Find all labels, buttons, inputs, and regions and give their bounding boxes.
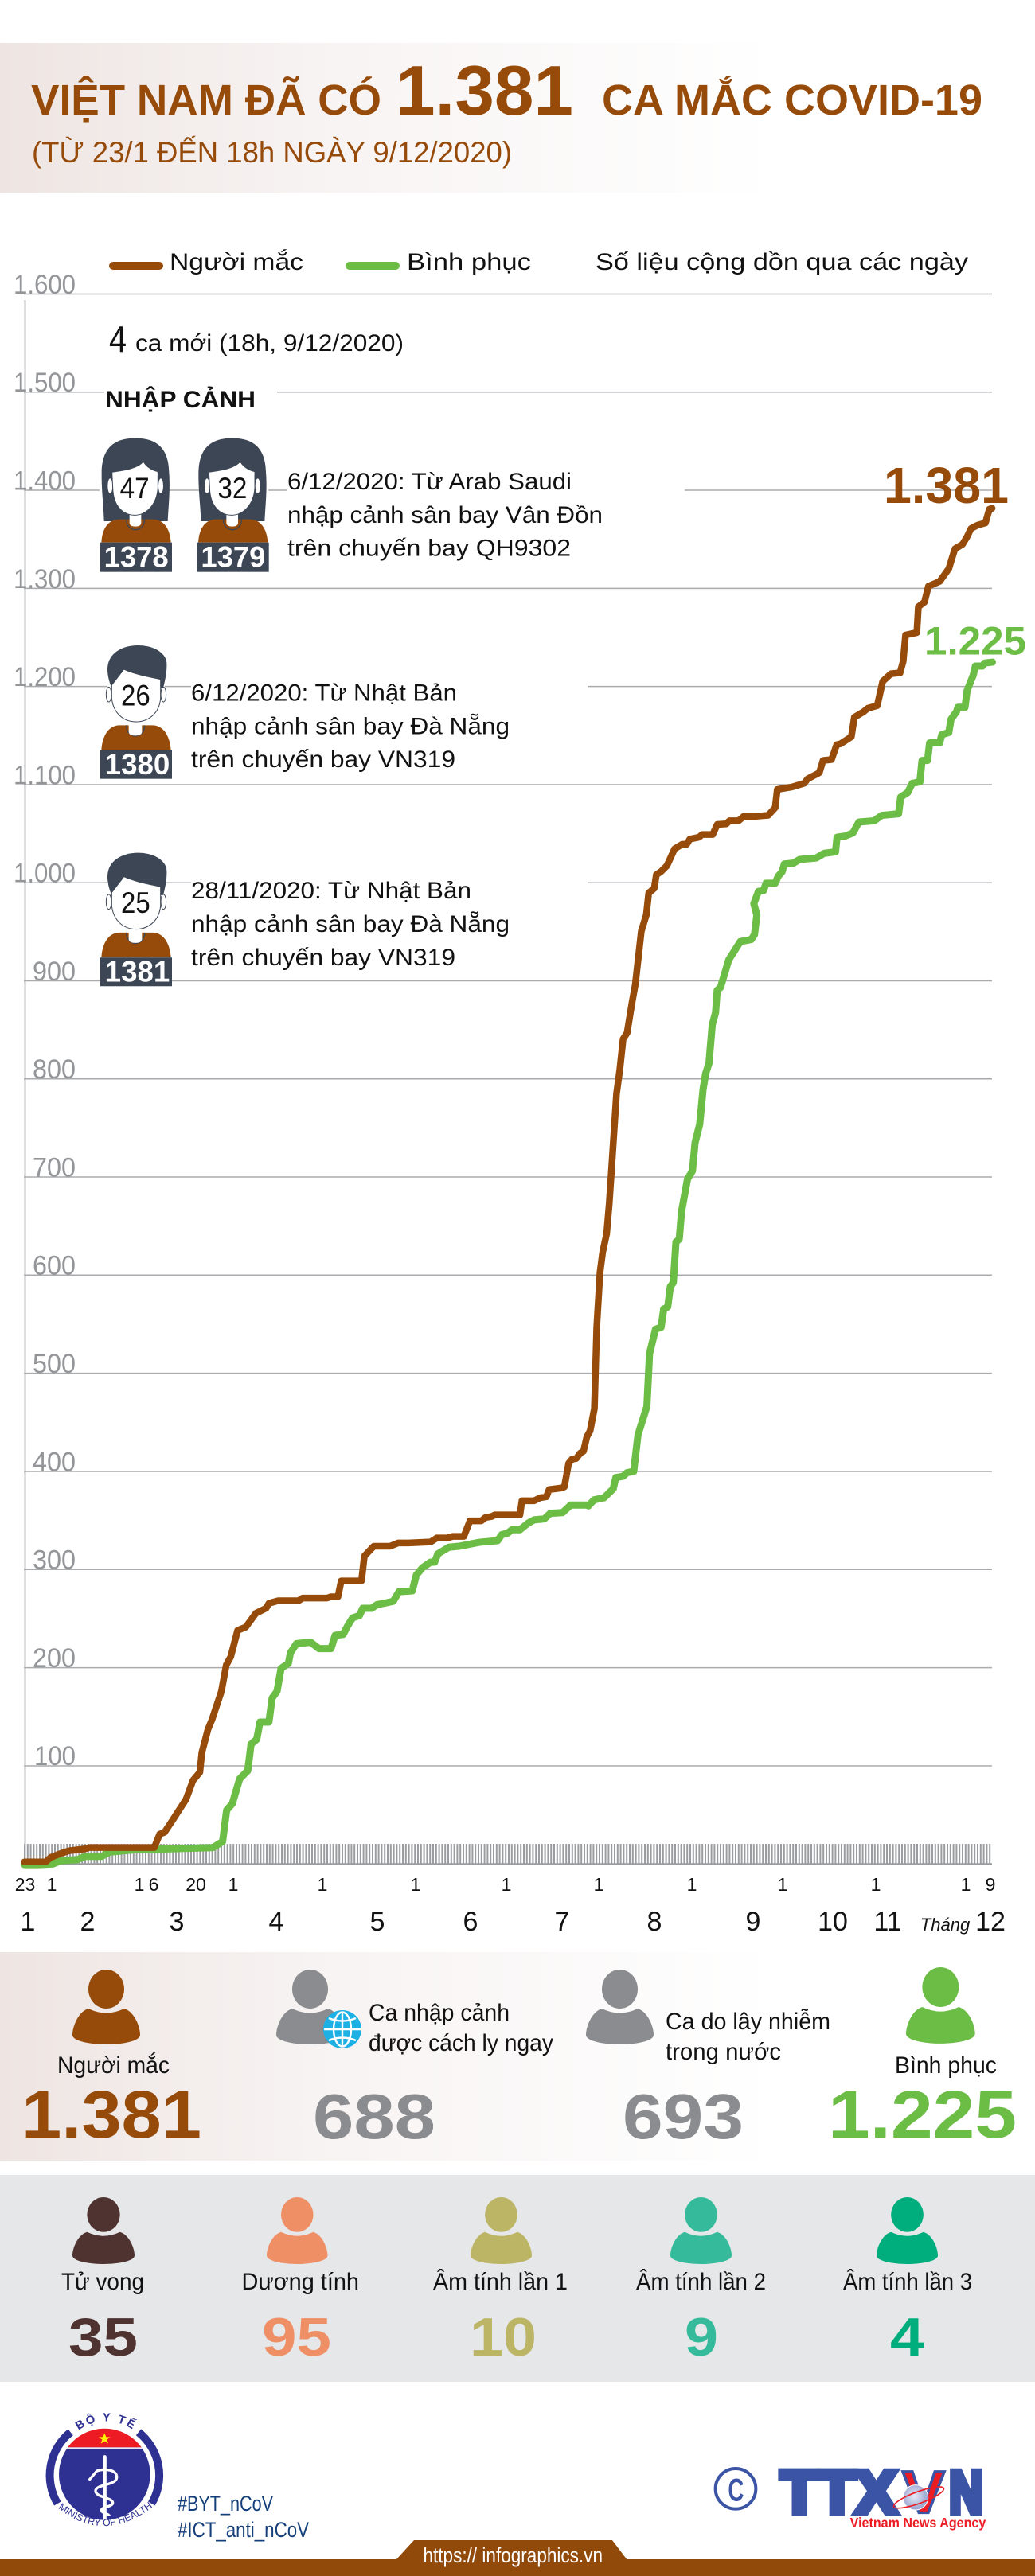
text: patients 1378 1379 [287, 469, 603, 562]
y axis labels: 1.400 [14, 466, 76, 497]
patient 1380 [100, 645, 172, 781]
stat: âm tính lần 1: Âm tính lần 1 [433, 2269, 568, 2295]
logo: ttxvn: N [949, 2459, 982, 2526]
stat: tử vong: 35 [68, 2307, 138, 2368]
x axis month labels: 4 [269, 1907, 283, 1937]
stat: âm tính lần 2: Âm tính lần 2 [636, 2269, 766, 2295]
new cases heading: ca mới (18h, 9/12/2020) [135, 330, 404, 357]
stat: ca lây nhiễm trong nước [586, 1970, 830, 2152]
x axis day labels: 1 [871, 1874, 881, 1895]
icon: globe [323, 2010, 361, 2048]
stat: ca lây nhiễm trong nước: trong nước [666, 2039, 781, 2065]
x axis day labels: 1 [502, 1874, 511, 1895]
stat: tử vong [61, 2197, 144, 2368]
y axis labels: 900 [33, 957, 76, 987]
patient 1378 [100, 438, 172, 574]
y axis labels: 1.200 [14, 662, 76, 692]
logo: ministry of health: BỘ Y TẾ [75, 2413, 137, 2430]
x axis day labels: 9 [986, 1874, 995, 1895]
x axis day labels [15, 1874, 995, 1895]
chart grid and axis [24, 294, 992, 1864]
x axis month labels: 2 [80, 1907, 95, 1937]
x axis month labels [21, 1907, 1006, 1937]
panel: totals [0, 1952, 1035, 2161]
text: patient 1380: nhập cảnh sân bay Đà Nẵng [191, 713, 510, 740]
y axis labels: 200 [33, 1643, 76, 1674]
stat: ca nhập cảnh: Ca nhập cảnh [369, 2000, 510, 2026]
legend: Bình phục [407, 249, 531, 275]
x axis day labels: 1 [47, 1874, 57, 1895]
hashtags: #BYT_nCoV [178, 2492, 273, 2516]
stat: ca nhập cảnh [276, 1970, 553, 2152]
panel: outcomes [0, 2175, 1035, 2382]
patient 1378: 1378 [104, 541, 169, 574]
legend: Người mắc [170, 249, 303, 275]
stat: dương tính: Dương tính [242, 2269, 359, 2295]
footer bar [0, 2540, 1035, 2576]
heading: nhập cảnh: NHẬP CẢNH [105, 386, 256, 413]
stat: âm tính lần 3: 4 [890, 2307, 924, 2368]
text: patient 1381: trên chuyến bay VN319 [191, 945, 455, 971]
stat: người mắc [21, 1970, 201, 2152]
hashtags: #ICT_anti_nCoV [178, 2518, 309, 2542]
x axis day labels: 1 [135, 1874, 144, 1895]
x axis day labels: 20 [186, 1874, 206, 1895]
x axis day labels: 1 [228, 1874, 238, 1895]
patient 1381 [100, 853, 172, 988]
x axis month labels: 10 [818, 1907, 848, 1937]
logo: ttxvn: Vietnam News Agency [850, 2515, 986, 2531]
y axis labels: 1.100 [14, 761, 76, 791]
x axis month labels: 7 [555, 1907, 569, 1937]
patient 1381: 25 [121, 886, 150, 919]
y axis labels: 400 [33, 1447, 76, 1477]
y axis labels: 100 [34, 1741, 76, 1771]
header band [0, 43, 1035, 193]
x axis day labels: 1 [318, 1874, 327, 1895]
text: patient 1381: 28/11/2020: Từ Nhật Bản [191, 878, 471, 904]
y axis labels: 700 [33, 1152, 76, 1183]
stat: ca lây nhiễm trong nước: Ca do lây nhiễm [666, 2009, 830, 2035]
x axis day labels: 1 [687, 1874, 697, 1895]
patient 1378: 47 [120, 471, 150, 505]
x axis month labels: 3 [170, 1907, 184, 1937]
patient 1379: 32 [217, 471, 247, 505]
x axis month labels: 5 [370, 1907, 385, 1937]
line: người mắc (confirmed) [25, 509, 992, 1862]
stat: dương tính [242, 2197, 359, 2368]
x axis day labels: 1 [961, 1874, 971, 1895]
stat: người mắc: Người mắc [57, 2052, 170, 2079]
end value: người mắc: 1.381 [884, 457, 1009, 514]
x axis day labels: 1 [594, 1874, 603, 1895]
line: bình phục (recovered) [25, 662, 992, 1865]
patient 1379 [197, 438, 269, 574]
x axis month labels: 1 [21, 1907, 35, 1937]
stat: âm tính lần 1: 10 [470, 2307, 537, 2368]
text: patients 1378 1379: nhập cảnh sân bay Vân Đồn [287, 502, 603, 528]
stat: ca nhập cảnh: 688 [313, 2081, 435, 2152]
stat: bình phục [828, 1967, 1017, 2152]
x axis month labels: 6 [463, 1907, 478, 1937]
y axis labels: 500 [33, 1349, 76, 1379]
icon: copyright [716, 2469, 756, 2509]
y axis labels: 600 [33, 1251, 76, 1281]
y axis labels: 1.000 [14, 858, 76, 888]
stat: âm tính lần 2: 9 [685, 2307, 718, 2368]
x axis day labels: 1 [778, 1874, 787, 1895]
stat: bình phục: 1.225 [828, 2077, 1017, 2152]
logo: ttxvn: TTX [781, 2459, 896, 2526]
stat: dương tính: 95 [262, 2307, 331, 2368]
y axis labels [14, 270, 76, 1771]
title [31, 51, 982, 130]
x axis day labels: 1 [411, 1874, 420, 1895]
stat: ca nhập cảnh: được cách ly ngay [369, 2030, 553, 2056]
title: 1.381 [396, 51, 573, 130]
text: patient 1381 [191, 878, 510, 971]
x axis month labels: 8 [647, 1907, 662, 1937]
logo: ministry of health [46, 2413, 164, 2526]
stat: bình phục: Bình phục [895, 2052, 997, 2079]
x axis month labels: 11 [873, 1907, 902, 1937]
y axis labels: 300 [33, 1545, 76, 1576]
y axis labels: 800 [33, 1054, 76, 1085]
logo: ttxvn [716, 2459, 986, 2531]
icon: copyright: C [728, 2473, 744, 2508]
patient 1381: 1381 [105, 956, 170, 988]
patient 1380: 1380 [105, 748, 170, 781]
logo: ministry of health: MINISTRY OF HEALTH [59, 2502, 153, 2526]
footer bar: https:// infographics.vn [424, 2543, 603, 2567]
text: patient 1380 [191, 680, 510, 773]
text: patient 1380: trên chuyến bay VN319 [191, 746, 455, 773]
x axis month labels: 12 [975, 1907, 1006, 1937]
patient 1380: 26 [121, 679, 150, 712]
subtitle: (TỪ 23/1 ĐẾN 18h NGÀY 9/12/2020) [32, 136, 512, 169]
title: VIỆT NAM ĐÃ CÓ [31, 76, 381, 124]
y axis labels: 1.500 [14, 368, 76, 398]
text: patients 1378 1379: 6/12/2020: Từ Arab Saudi [287, 469, 572, 495]
new cases heading [109, 318, 404, 360]
stat: âm tính lần 3 [843, 2197, 972, 2368]
stat: âm tính lần 2 [636, 2197, 766, 2368]
y axis labels: 1.300 [14, 564, 76, 594]
legend: Số liệu cộng dồn qua các ngày [596, 249, 968, 275]
title: CA MẮC COVID-19 [602, 76, 982, 124]
x axis day labels: 23 [15, 1874, 35, 1895]
y axis labels: 1.600 [14, 270, 76, 300]
stat: ca lây nhiễm trong nước: 693 [623, 2081, 744, 2152]
text: patients 1378 1379: trên chuyến bay QH9302 [287, 535, 571, 562]
text: patient 1380: 6/12/2020: Từ Nhật Bản [191, 680, 457, 707]
stat: người mắc: 1.381 [21, 2077, 201, 2152]
logo: ttxvn: V [902, 2459, 945, 2526]
stat: âm tính lần 3: Âm tính lần 3 [843, 2269, 972, 2295]
legend [109, 249, 968, 275]
text: patient 1381: nhập cảnh sân bay Đà Nẵng [191, 911, 510, 937]
stat: tử vong: Tử vong [61, 2269, 144, 2295]
end value: bình phục: 1.225 [924, 619, 1026, 664]
patient 1379: 1379 [201, 541, 265, 574]
x axis day labels: 6 [149, 1874, 158, 1895]
stat: âm tính lần 1 [433, 2197, 568, 2368]
new cases heading: 4 [109, 318, 127, 360]
x axis month labels: 9 [746, 1907, 760, 1937]
hashtags [178, 2492, 309, 2542]
x axis month labels: Tháng [920, 1915, 971, 1935]
